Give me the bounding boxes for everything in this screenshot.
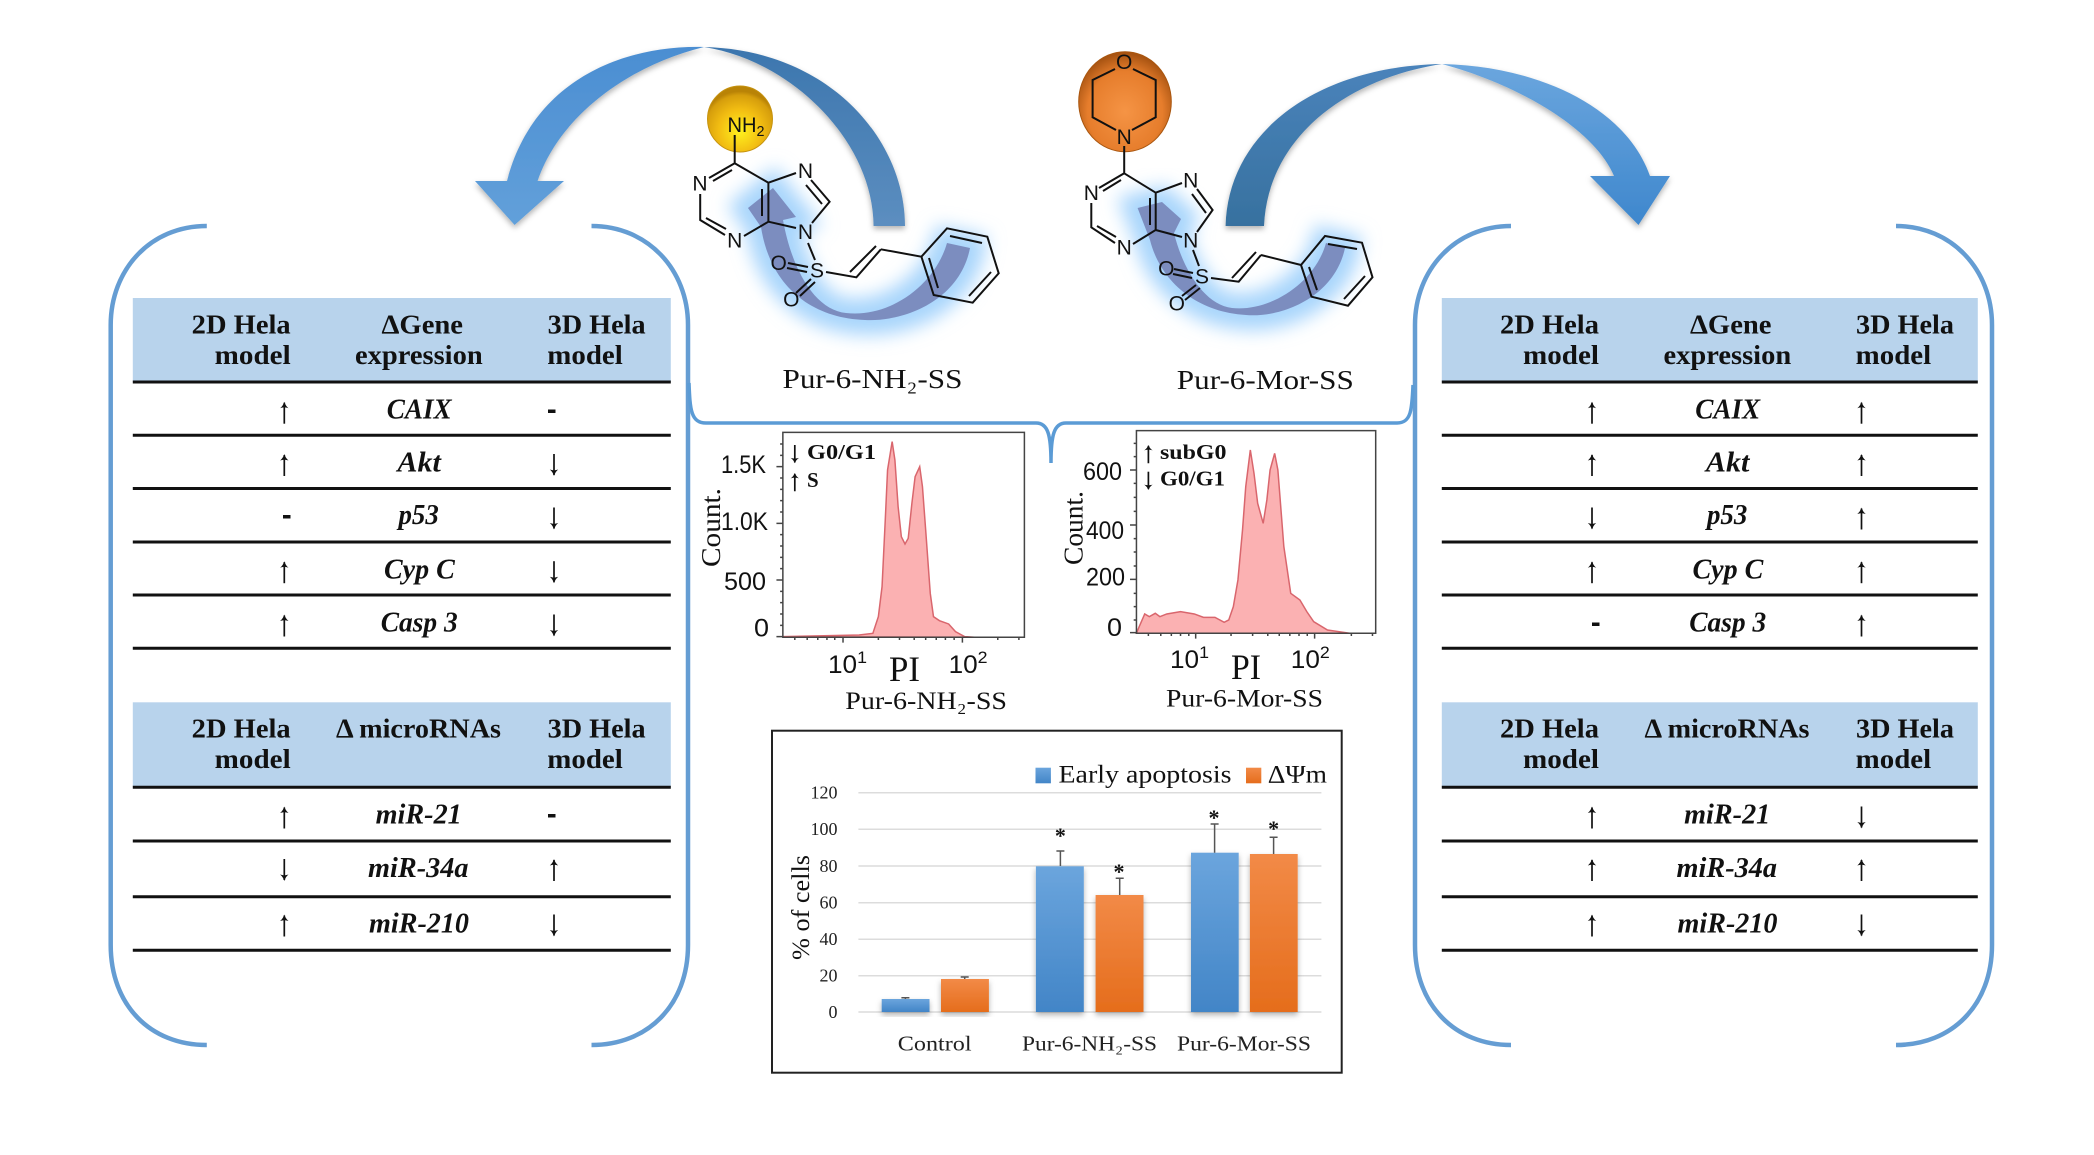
atom labels: N [1117, 126, 1132, 149]
annotation: G0/G1 down, S up [791, 440, 876, 492]
row: miR-34a: miR-34a [1676, 853, 1777, 884]
table: right gene expression [1442, 298, 1978, 648]
table header: 3D Hela [548, 308, 646, 339]
chart: PI histogram Pur-6-NH2-SS: 0 [754, 615, 769, 643]
annotation: subG0 up, G0/G1 down: subG0 [1160, 440, 1226, 464]
y axis labels: 80 [820, 856, 838, 876]
table header: 2D Hela [192, 308, 291, 339]
x axis labels [898, 1032, 1311, 1056]
y axis labels [810, 782, 838, 1022]
row: p53 [1588, 500, 1866, 531]
bars: control [882, 979, 989, 1012]
significance stars [1055, 805, 1279, 884]
legend: ΔΨm [1268, 761, 1328, 788]
table header [1442, 298, 1978, 382]
chart: PI histogram Pur-6-NH2-SS: 10 [828, 651, 856, 679]
row: CAIX: CAIX [1695, 394, 1761, 425]
brace joining the panels to the central charts [689, 383, 1413, 463]
row: miR-21: miR-21 [1684, 800, 1770, 831]
table header: expression [1664, 339, 1791, 370]
chart: PI histogram Pur-6-Mor-SS: 2 [1320, 643, 1330, 662]
table header: expression [355, 339, 483, 370]
row: miR-210 [1588, 909, 1866, 940]
table header: 3D Hela [548, 712, 646, 743]
label: Pur-6-Mor-SS: Pur-6-Mor-SS [1177, 364, 1354, 395]
significance stars: * [1114, 859, 1124, 884]
y axis labels: 0 [828, 1002, 838, 1022]
row: miR-210: miR-210 [369, 909, 469, 940]
arrow: curved arrow to left panel [475, 47, 905, 226]
row: Casp 3 [1592, 608, 1866, 639]
x axis labels: Control [898, 1032, 972, 1056]
row: p53 [283, 500, 558, 531]
row: Cyp C [280, 555, 558, 586]
row: Akt [280, 448, 558, 479]
table header: model [547, 743, 623, 774]
table header: 3D Hela [1856, 712, 1954, 743]
row: CAIX [1588, 394, 1866, 425]
atom labels: N [1183, 230, 1198, 252]
molecule: Pur-6-Mor-SS [1079, 51, 1372, 316]
row: p53: p53 [1705, 500, 1747, 531]
atom labels: N [1084, 182, 1099, 205]
annotation: G0/G1 down, S up: S [807, 468, 819, 492]
chart: PI histogram Pur-6-Mor-SS [1058, 431, 1376, 713]
annotation: G0/G1 down, S up: G0/G1 [807, 440, 876, 464]
table header: Δ microRNAs [1644, 712, 1810, 743]
row: miR-21 [1588, 800, 1866, 831]
row: miR-210: miR-210 [1678, 909, 1778, 940]
significance stars: * [1208, 805, 1220, 830]
row: p53: p53 [397, 500, 439, 531]
atom labels: S [1195, 266, 1209, 288]
x axis labels: Pur-6-Mor-SS [1177, 1032, 1311, 1056]
structure bonds [700, 135, 999, 303]
table header: model [1856, 339, 1932, 370]
label: Pur-6-NH2-SS: Pur-6-NH₂-SS [782, 363, 962, 394]
table header [133, 702, 671, 787]
chart: apoptosis and membrane potential bar chart [772, 731, 1342, 1073]
table header: model [1523, 743, 1599, 774]
chart: PI histogram Pur-6-Mor-SS: PI [1231, 647, 1261, 687]
chart: PI histogram Pur-6-NH2-SS: 10 [949, 651, 976, 679]
atom labels: NH [728, 114, 758, 137]
chart: PI histogram Pur-6-NH2-SS: 2 [978, 648, 988, 667]
atom labels: O [771, 252, 787, 275]
atom labels: O [1158, 258, 1174, 280]
chart: PI histogram Pur-6-NH2-SS: 500 [724, 568, 766, 596]
y axis labels: 60 [820, 892, 838, 912]
table header: model [547, 339, 623, 370]
structure bonds [1091, 69, 1372, 306]
row: miR-34a [280, 853, 558, 884]
table header: 3D Hela [1856, 308, 1954, 339]
bars: Pur-6-NH2-SS [1036, 866, 1144, 1012]
chart: PI histogram Pur-6-Mor-SS: 600 [1083, 458, 1122, 486]
row: Akt: Akt [1704, 448, 1751, 479]
y axis labels: 40 [820, 929, 838, 949]
atom labels: O [1116, 51, 1132, 74]
chart: PI histogram Pur-6-NH2-SS: PI [889, 649, 920, 689]
row: Cyp C: Cyp C [384, 555, 455, 586]
x axis labels: Pur-6-NH₂-SS [1022, 1032, 1157, 1056]
atom labels: N [692, 172, 708, 196]
chart: PI histogram Pur-6-NH2-SS: Pur-6-NH₂-SS [845, 688, 1007, 715]
chart: PI histogram Pur-6-NH2-SS [695, 432, 1024, 715]
chart: PI histogram Pur-6-Mor-SS: 10 [1170, 646, 1198, 674]
atom labels: S [810, 260, 824, 282]
molecule: Pur-6-NH2-SS [692, 86, 999, 320]
icon: gold ball on the amino group [708, 86, 772, 152]
arrow: curved arrow to right panel [1226, 64, 1670, 226]
table header [133, 298, 671, 382]
row: Cyp C: Cyp C [1692, 555, 1764, 586]
atom labels: 2 [757, 123, 764, 140]
atom labels: N [727, 230, 742, 252]
chart: PI histogram Pur-6-Mor-SS: 0 [1107, 614, 1122, 642]
row: Casp 3 [280, 608, 558, 639]
axis title: % of cells [788, 855, 815, 960]
error bars [901, 824, 1278, 999]
chart: PI histogram Pur-6-Mor-SS: Pur-6-Mor-SS [1166, 686, 1323, 713]
row: Cyp C [1588, 555, 1866, 586]
chart: PI histogram Pur-6-NH2-SS: 1.0K [721, 508, 768, 536]
y axis labels: 120 [810, 782, 838, 802]
histogram plot [776, 432, 1024, 643]
significance stars: * [1055, 823, 1066, 848]
chart: PI histogram Pur-6-NH2-SS: 1 [857, 648, 867, 667]
chart: PI histogram Pur-6-NH2-SS: Count. [695, 488, 726, 567]
row: miR-34a: miR-34a [368, 853, 468, 884]
chart: PI histogram Pur-6-Mor-SS: 200 [1086, 564, 1125, 592]
atom labels: N [798, 160, 813, 183]
panel: left results bracket [111, 226, 688, 1045]
y axis labels: 100 [810, 819, 838, 839]
atom labels: O [783, 288, 799, 312]
legend [1036, 761, 1328, 788]
table header: model [1523, 339, 1599, 370]
table header: 2D Hela [1500, 308, 1599, 339]
atom labels: N [1117, 236, 1132, 260]
row: CAIX: CAIX [387, 394, 453, 425]
row: Casp 3: Casp 3 [1689, 608, 1766, 639]
icon: blue glow and curved arrow on the scaffold [748, 188, 970, 320]
chart: PI histogram Pur-6-Mor-SS: Count. [1058, 491, 1089, 565]
icon: blue glow and curved arrow on the scaffold [1138, 202, 1345, 315]
chart: PI histogram Pur-6-Mor-SS: 1 [1199, 643, 1209, 662]
atom labels: N [1183, 170, 1198, 192]
panel: right results bracket [1415, 226, 1992, 1045]
row: Casp 3: Casp 3 [381, 608, 458, 639]
row: CAIX [280, 394, 556, 425]
atom labels [692, 114, 824, 312]
chart: PI histogram Pur-6-NH2-SS: 1.5K [721, 451, 766, 479]
significance stars: * [1268, 816, 1279, 841]
table header: 2D Hela [1500, 712, 1599, 743]
table: left microRNAs [133, 702, 671, 950]
chart: PI histogram Pur-6-Mor-SS: 400 [1086, 517, 1124, 545]
y axis labels: 20 [820, 966, 838, 986]
table header: 2D Hela [192, 712, 291, 743]
row: miR-34a [1588, 853, 1866, 884]
table header: model [215, 743, 291, 774]
histogram plot [1130, 431, 1376, 639]
table header: model [1856, 743, 1932, 774]
row: miR-210 [280, 909, 558, 940]
annotation: subG0 up, G0/G1 down [1144, 440, 1226, 491]
legend: Early apoptosis [1058, 761, 1232, 788]
table: left gene expression [133, 298, 671, 648]
row: miR-21 [280, 800, 556, 831]
icon: orange ball on the morpholine ring [1079, 52, 1171, 152]
chart: PI histogram Pur-6-Mor-SS: 10 [1291, 646, 1319, 674]
atom labels: N [798, 221, 813, 244]
atom labels [1084, 51, 1209, 316]
table header: Δ microRNAs [336, 712, 501, 743]
annotation: subG0 up, G0/G1 down: G0/G1 [1160, 467, 1225, 491]
table: right microRNAs [1442, 702, 1978, 950]
table header: ΔGene [382, 308, 463, 339]
row: miR-21: miR-21 [376, 800, 462, 831]
atom labels: O [1169, 292, 1185, 316]
row: Akt: Akt [395, 448, 442, 479]
table header: model [215, 339, 291, 370]
table header: ΔGene [1690, 308, 1772, 339]
table header [1442, 702, 1978, 787]
row: Akt [1588, 448, 1866, 479]
bars: Pur-6-Mor-SS [1191, 853, 1298, 1012]
